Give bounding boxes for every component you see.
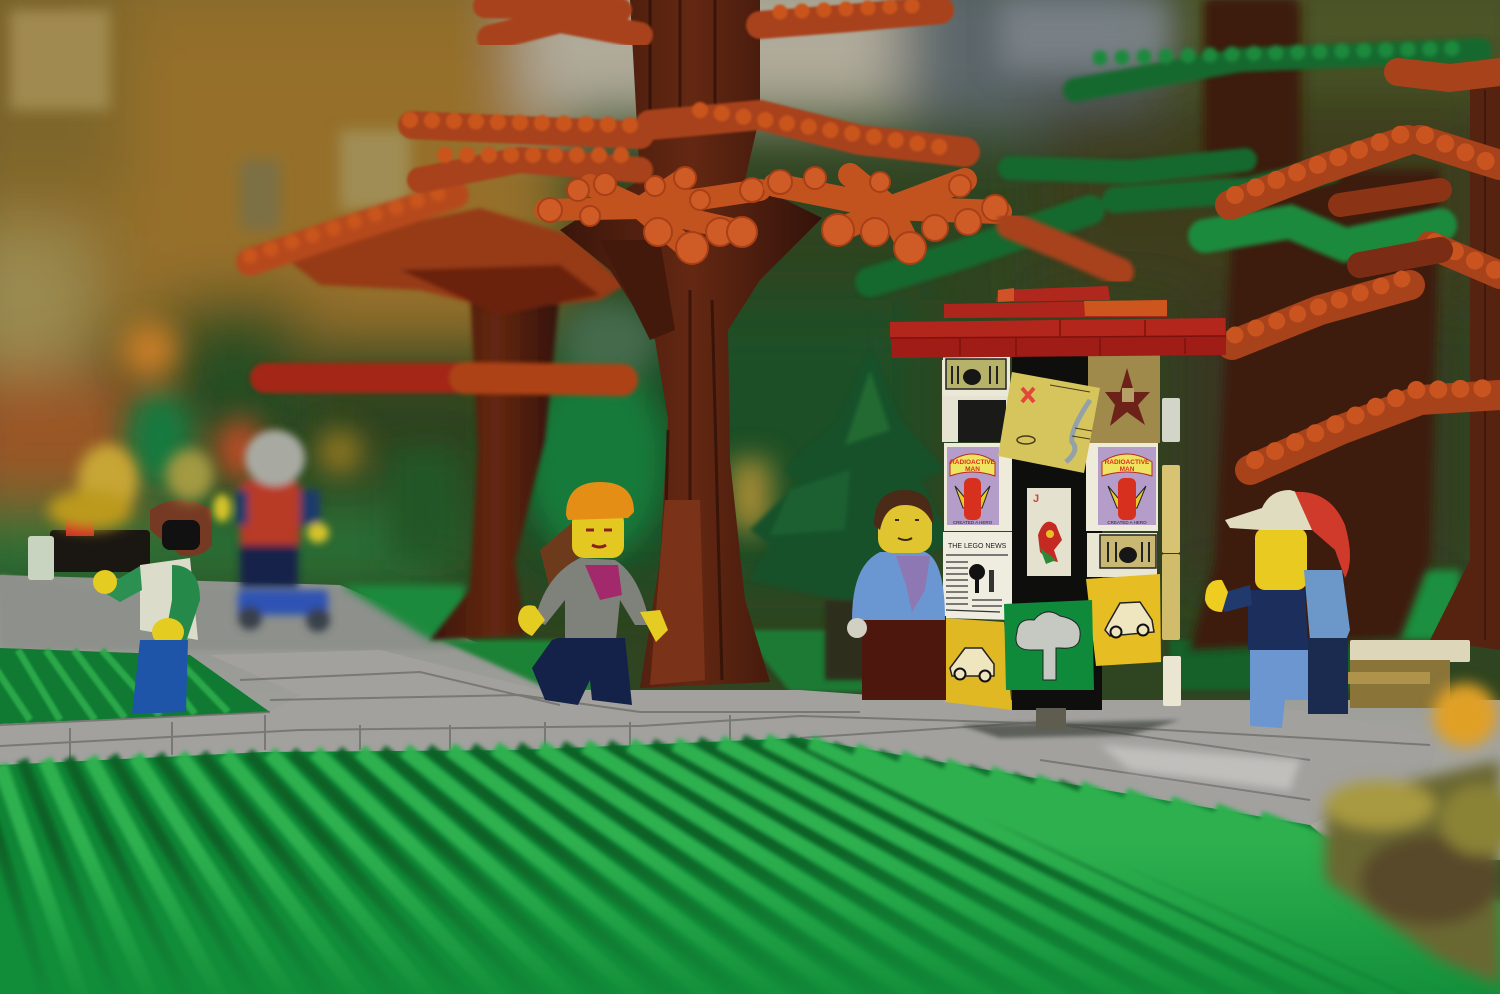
comic poster left: CREATED A HERO [953, 520, 993, 525]
top branch [485, 5, 940, 38]
main tree orange branches [410, 5, 1120, 272]
newspaper tile [943, 532, 1012, 620]
branch 2 [1232, 242, 1500, 345]
kiosk post [1036, 708, 1066, 730]
branch 1 [1230, 72, 1500, 205]
blurred yellow figures in distance [48, 444, 214, 530]
map tile [998, 372, 1100, 473]
comic poster right: MAN [1120, 466, 1135, 473]
joker card: J [1033, 493, 1039, 505]
red roof [890, 286, 1226, 358]
minifigure: woman in orange hard hat [518, 482, 668, 705]
right background tree with green branches [870, 0, 1480, 650]
left tree [250, 188, 625, 640]
foreground green baseplate with stud rows [0, 738, 1500, 994]
kiosk side studs [924, 398, 1181, 706]
kiosk [890, 286, 1226, 730]
comic poster right: RADIOACTIVE [1105, 459, 1150, 466]
comic poster right: CREATED A HERO [1107, 520, 1147, 525]
right foreground tree with orange branches [1230, 70, 1500, 650]
minifigure: woman with brown hair [847, 490, 946, 700]
branch 3 [1250, 388, 1500, 470]
blurred minifigure on skateboard [213, 430, 330, 632]
bench [1348, 640, 1470, 708]
minifigure: cameraman [28, 500, 212, 714]
newspaper tile: THE LEGO NEWS [948, 543, 1007, 550]
middle branches [410, 110, 965, 180]
joker card [1027, 488, 1071, 576]
kiosk pillar [1012, 355, 1102, 710]
yellow car tile left [944, 618, 1012, 710]
ninja tile lower [1087, 533, 1157, 577]
camera [28, 518, 150, 580]
left lawn baseplate [0, 648, 270, 724]
comic poster right [1086, 443, 1158, 531]
path paving tiles [0, 650, 1440, 825]
minifigure: man with white cap [1205, 490, 1312, 728]
grey path and far lawns [0, 570, 1500, 860]
yellow car tile right [1086, 574, 1161, 666]
main tree trunk [560, 0, 822, 688]
small pine tree [750, 350, 950, 680]
comic poster left: RADIOACTIVE [950, 459, 996, 466]
left tree canopy [250, 188, 625, 380]
star panel [1088, 355, 1160, 443]
blurred yellow object foreground right [1325, 683, 1500, 985]
star-shaped branch right [768, 167, 1120, 272]
comic poster left [944, 443, 1012, 531]
star-shaped branch left [538, 167, 764, 264]
comic poster left: MAN [965, 466, 980, 473]
green tree tile [1004, 600, 1094, 690]
minifigure: woman with red hair [1295, 492, 1350, 714]
ninja tile top [943, 356, 1010, 396]
